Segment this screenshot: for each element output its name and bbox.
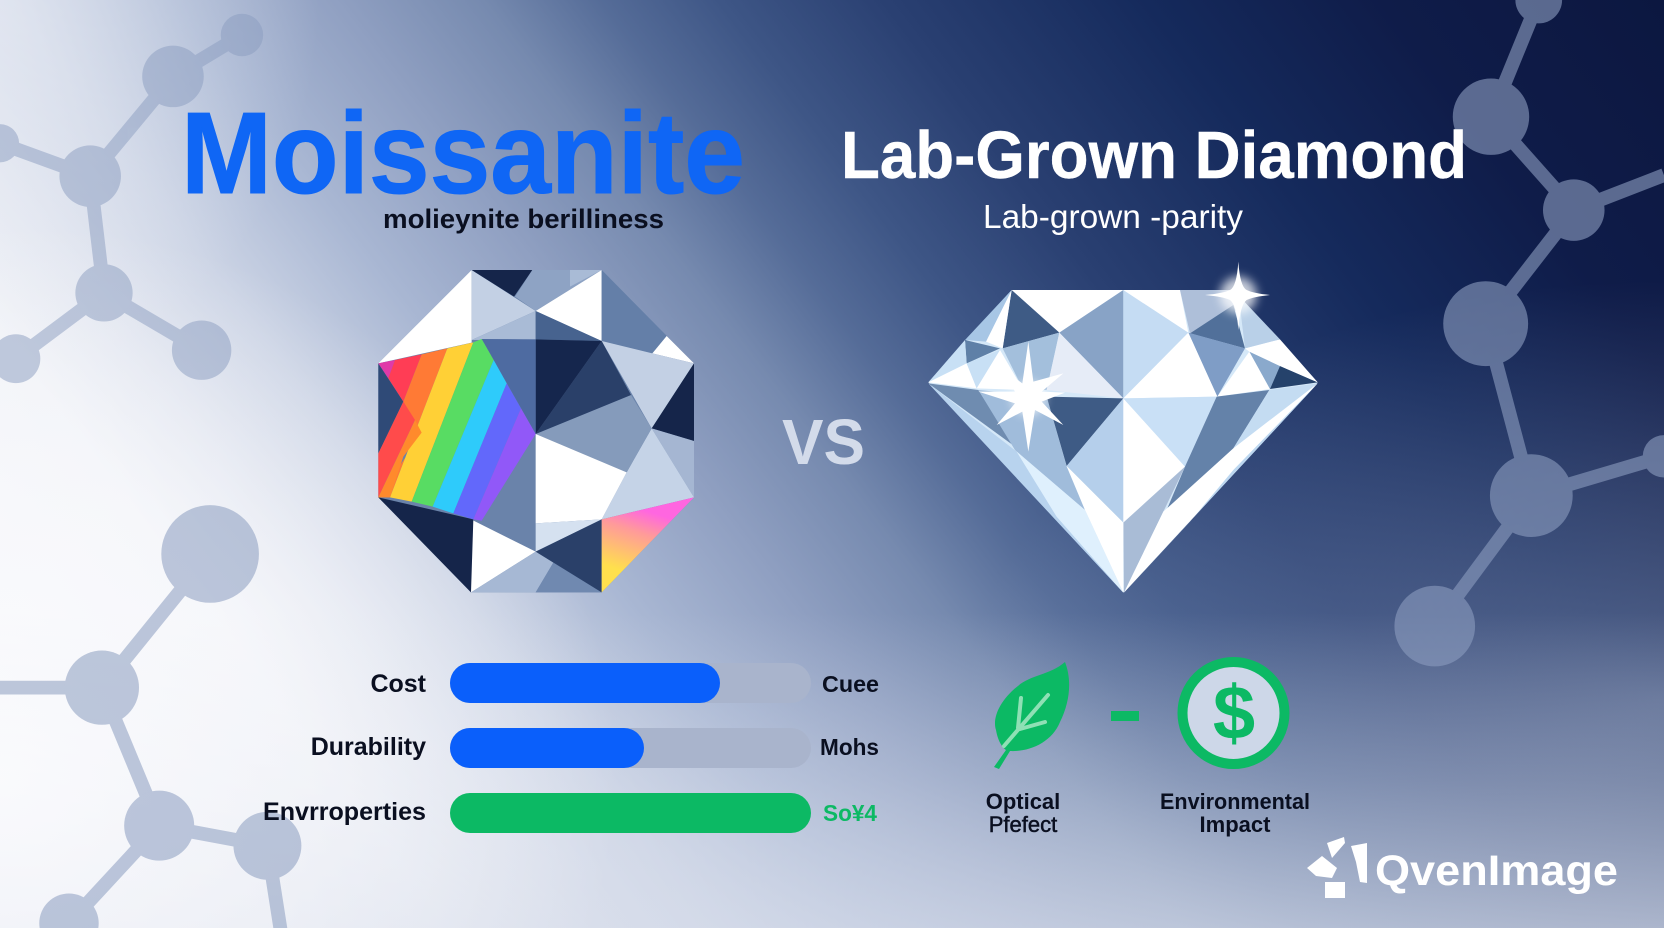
label: Optical Pfefect: Optical bbox=[986, 789, 1060, 814]
icon: dollar coin bbox=[1182, 662, 1284, 764]
bar row: Cost: Cost bbox=[370, 670, 427, 698]
minus sign bbox=[1111, 711, 1139, 721]
icon: moissanite gem with rainbow bbox=[378, 270, 694, 592]
sparkle: lower left bbox=[978, 342, 1065, 452]
logo mark bbox=[1307, 837, 1367, 898]
icon: dollar coin: $ bbox=[1213, 671, 1255, 756]
label: Environmental Impact bbox=[1160, 789, 1310, 837]
bar row: Envrroperties: Envrroperties bbox=[263, 798, 426, 826]
logo: QvenImage: QvenImage bbox=[1375, 847, 1618, 895]
title: Lab-Grown Diamond: Lab-Grown Diamond bbox=[841, 118, 1467, 193]
bar row: Envrroperties: So¥4 bbox=[823, 800, 877, 826]
title: Moissanite: Moissanite bbox=[181, 88, 745, 218]
label: Environmental Impact: Impact bbox=[1200, 812, 1271, 837]
bar row: Durability: Durability bbox=[311, 733, 426, 761]
label: Optical Pfefect bbox=[986, 789, 1060, 837]
bar chart: comparison bbox=[263, 663, 879, 833]
label: Environmental Impact: Environmental bbox=[1160, 789, 1310, 814]
label: Optical Pfefect: Pfefect bbox=[989, 812, 1057, 837]
subtitle: moissanite brilliance: molieynite berilliness bbox=[383, 204, 664, 234]
icon: leaf bbox=[994, 662, 1069, 769]
icon: lab-grown diamond bbox=[928, 262, 1318, 593]
molecule pattern: lower left bbox=[0, 505, 301, 928]
bar row: Envrroperties bbox=[263, 793, 877, 833]
bar row: Cost: Cuee bbox=[822, 671, 879, 697]
bar row: Durability bbox=[311, 728, 879, 768]
rainbow refraction stripes bbox=[378, 339, 536, 521]
bar row: Durability: Mohs bbox=[820, 734, 879, 760]
subtitle: lab-grown parity: Lab-grown -parity bbox=[983, 198, 1244, 235]
sparkle: upper right bbox=[1205, 262, 1270, 330]
molecule pattern: right bbox=[1394, 0, 1664, 666]
VS label: VS bbox=[782, 406, 865, 478]
logo: QvenImage bbox=[1307, 837, 1618, 898]
molecule pattern: upper left bbox=[0, 14, 263, 383]
bar row: Cost bbox=[370, 663, 879, 703]
